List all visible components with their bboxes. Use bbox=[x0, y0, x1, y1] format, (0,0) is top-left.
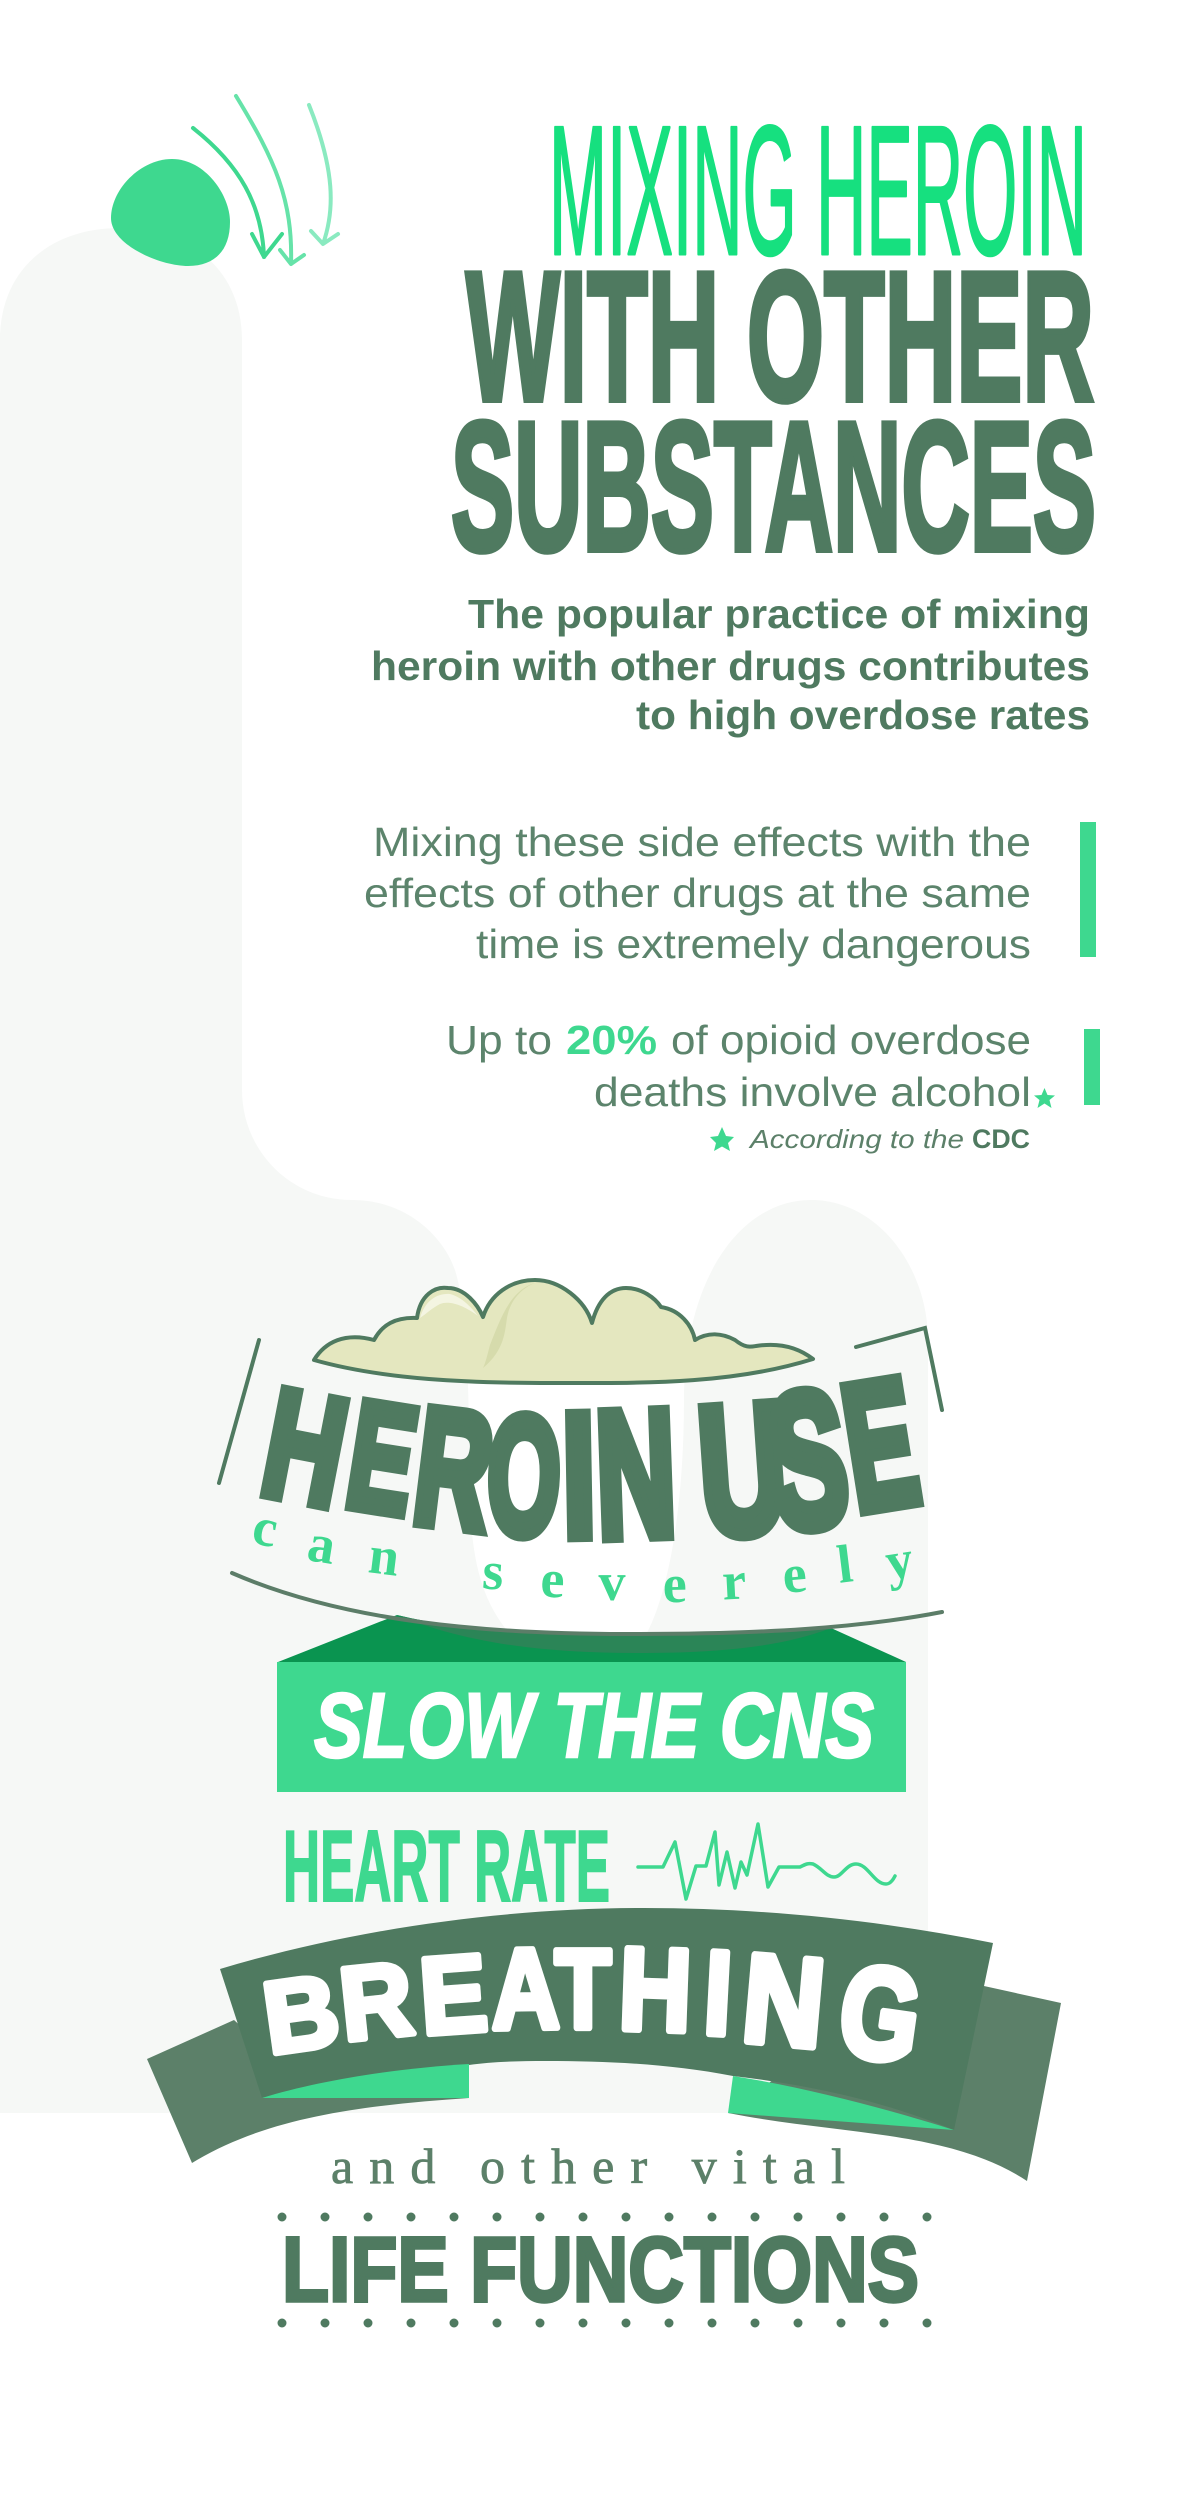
text block: mixing side effects bbox=[364, 819, 1031, 967]
heading: heroin use: E bbox=[831, 1341, 930, 1550]
dotted rule top bbox=[282, 2212, 930, 2222]
footnote: According to the bbox=[748, 1124, 964, 1154]
heading: heroin use: U bbox=[692, 1363, 793, 1575]
footnote: CDC bbox=[972, 1124, 1030, 1154]
subheading: can severely: l bbox=[834, 1533, 856, 1595]
heading: breathing: N bbox=[737, 1928, 830, 2075]
text: and other vital: and other vital bbox=[331, 2138, 845, 2194]
text block: opioid statistic: 20% bbox=[566, 1017, 657, 1063]
footnote bbox=[710, 1124, 1030, 1154]
background shape bbox=[0, 228, 928, 2113]
heading: breathing: H bbox=[617, 1923, 694, 2057]
dotted rule bottom bbox=[282, 2318, 930, 2328]
text block: mixing side effects: Mixing these side effects with the bbox=[373, 819, 1031, 865]
heading: heroin use: E bbox=[337, 1369, 427, 1548]
icon: falling arrows bbox=[193, 96, 338, 264]
accent bar 1 bbox=[1080, 822, 1096, 957]
title bbox=[451, 87, 1096, 589]
subheading: can severely: y bbox=[881, 1528, 917, 1592]
subheading: can severely: a bbox=[304, 1512, 340, 1576]
label: heart rate: HEART RATE bbox=[283, 1811, 610, 1923]
ribbon: left tail bbox=[147, 2020, 469, 2163]
green roof bbox=[278, 1615, 906, 1662]
heading: heroin use: S bbox=[759, 1350, 857, 1571]
accent bar 2 bbox=[1084, 1029, 1100, 1105]
powder shading bbox=[483, 1283, 535, 1368]
heading: breathing: I bbox=[701, 1926, 735, 2061]
subheading: can severely: r bbox=[721, 1550, 748, 1612]
illustration: heroin powder pile bbox=[314, 1280, 813, 1383]
icon: ecg line bbox=[638, 1824, 895, 1899]
subtitle bbox=[371, 591, 1090, 738]
roof shadow bbox=[397, 1615, 831, 1653]
text block: opioid statistic: Up to bbox=[446, 1017, 552, 1063]
heading: breathing: B bbox=[256, 1952, 346, 2076]
subheading: can severely: n bbox=[366, 1525, 403, 1588]
subtitle: heroin with other drugs contributes bbox=[371, 643, 1090, 689]
heading: heroin use: O bbox=[484, 1380, 564, 1571]
heading: breathing: A bbox=[490, 1925, 560, 2054]
heading: breathing: E bbox=[416, 1932, 491, 2058]
text block: opioid statistic: deaths involve alcohol bbox=[594, 1069, 1031, 1115]
icon: asterisk star bbox=[1034, 1088, 1055, 1108]
heading: heroin use: R bbox=[405, 1374, 502, 1566]
heading: heroin use: N bbox=[593, 1372, 679, 1576]
subheading: can severely: v bbox=[598, 1552, 626, 1612]
subheading: can severely: e bbox=[662, 1554, 687, 1614]
subheading: can severely: e bbox=[540, 1549, 566, 1609]
heading: breathing bbox=[256, 1923, 930, 2091]
subheading: can severely bbox=[248, 1496, 917, 1614]
heading: breathing: R bbox=[334, 1940, 418, 2063]
subheading: can severely: e bbox=[780, 1543, 809, 1605]
banner frame lines bbox=[219, 1328, 942, 1483]
subtitle: to high overdose rates bbox=[636, 692, 1090, 738]
heading: life functions: LIFE FUNCTIONS bbox=[282, 2219, 919, 2321]
subheading: can severely: s bbox=[481, 1540, 506, 1602]
text block: mixing side effects: effects of other drugs at the same bbox=[364, 870, 1031, 916]
banner bottom curve bbox=[232, 1573, 942, 1634]
heading: heroin use: H bbox=[250, 1357, 360, 1540]
text block: opioid statistic bbox=[446, 1017, 1031, 1115]
ribbon: main band bbox=[220, 1908, 993, 2130]
subheading: can severely: c bbox=[248, 1496, 283, 1559]
ribbon: right tail bbox=[728, 1986, 1061, 2181]
powder highlight bbox=[420, 1294, 478, 1318]
panel: slow the cns: SLOW THE CNS bbox=[314, 1675, 874, 1777]
heading: breathing: T bbox=[555, 1926, 611, 2052]
icon: footnote star bbox=[710, 1127, 734, 1151]
ribbon: right fold bbox=[728, 2076, 954, 2130]
ribbon: left fold bbox=[262, 2064, 469, 2098]
heading: heroin use: I bbox=[561, 1377, 597, 1574]
heading: heroin use bbox=[250, 1341, 930, 1576]
text block: opioid statistic: of opioid overdose bbox=[671, 1017, 1031, 1063]
icon: green blob bbox=[111, 159, 230, 266]
panel: slow the cns bbox=[277, 1662, 906, 1792]
subtitle: The popular practice of mixing bbox=[468, 591, 1090, 637]
heading: breathing: G bbox=[831, 1936, 930, 2091]
text block: mixing side effects: time is extremely dangerous bbox=[476, 921, 1031, 967]
